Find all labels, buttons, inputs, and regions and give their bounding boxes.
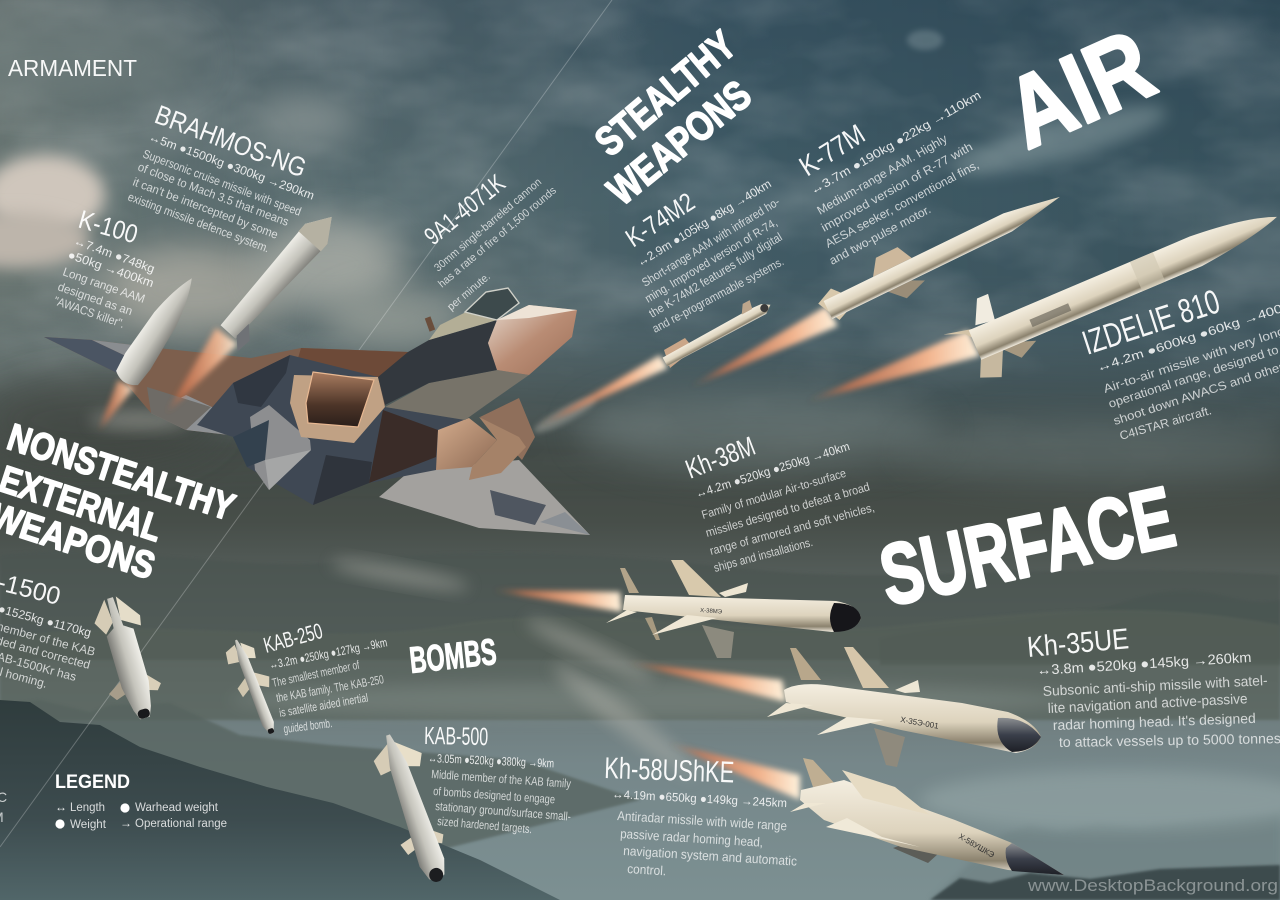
text block: IZDELIE 810: C4ISTAR aircraft. (1118, 403, 1213, 443)
text block: Kh-35UE: Subsonic anti-ship missile with satel- (1042, 672, 1268, 699)
text block: 9A1-4071K: per minute. (445, 271, 493, 313)
watermark: www.DesktopBackground.org (1027, 876, 1278, 895)
legend: length: ↔ (55, 800, 67, 814)
text block: Kh-35UE: lite navigation and active-passive (1047, 690, 1248, 716)
text block: Kh-35UE: to attack vessels up to 5000 tonnes (1059, 730, 1280, 750)
legend: weight (55, 819, 107, 831)
jet: forward fuselage (385, 370, 529, 420)
text block: K-77M: improved version of R-77 with (819, 139, 975, 235)
text block: Kh-58UShKE: Antiradar missile with wide range (617, 808, 787, 833)
text block: KAB-500: sized hardened targets. (437, 814, 533, 836)
heading: stealthy weapons: WEAPONS (599, 71, 760, 214)
text block: KAB-250: KAB-250 (261, 618, 325, 658)
text block: KAB-250: is satellite aided inertial (278, 691, 369, 720)
text block: K-77M: Medium-range AAM. Highly (814, 131, 950, 218)
text block: Kh-58UShKE (604, 752, 798, 878)
text block: K-74M2: and re-programmable systems. (650, 254, 786, 336)
text block: Kh-38M: missiles designed to defeat a broad (704, 480, 871, 540)
text block: IZDELIE 810: shoot down AWACS and other (1112, 360, 1280, 428)
text block: Kh-35UE: Kh-35UE (1026, 623, 1130, 664)
text block: KAB-1500 (0, 556, 97, 691)
text block: K-100: designed as an (56, 280, 134, 318)
text block: 9A1-4071K (419, 169, 559, 313)
legend: weight: Weight (70, 819, 107, 831)
text block: K-100: "AWACS killer". (52, 294, 127, 331)
text block: Kh-58UShKE: ↔4.19m ●650kg ●149kg →245km (612, 787, 787, 810)
text block: Kh-38M: range of armored and soft vehicles, (708, 500, 876, 558)
text block: K-74M2: K-74M2 (620, 186, 700, 253)
text block: Kh-38M: ships and installations. (712, 535, 814, 575)
text block: Kh-38M (681, 431, 876, 575)
text block: Kh-38M: ↔4.2m ●520kg ●250kg →40km (694, 439, 851, 501)
divider lines (0, 0, 612, 847)
legend: operational range: → (120, 816, 132, 830)
text block: K-77M: ↔3.7m ●190kg ●22kg →110km (808, 88, 983, 198)
text block: K-100: ●50kg →400km (66, 248, 156, 290)
text block: IZDELIE 810 (1078, 283, 1280, 443)
text block: Kh-58UShKE: control. (627, 861, 667, 878)
text block: BRAHMOS-NG: Supersonic cruise missile with speed (141, 147, 303, 219)
text block: K-77M: AESA seeker, conventional fins, (823, 158, 981, 251)
legend: operational range: Operational range (135, 818, 227, 830)
text block: K-74M2 (620, 177, 786, 336)
heading: bombs: BOMBS (408, 631, 498, 681)
missile: Kh-58UShKE (667, 743, 1064, 875)
text block: BRAHMOS-NG: it can't be intercepted by some (131, 175, 280, 242)
text fragments cut at left edge (0, 789, 7, 825)
text block: KAB-500: ↔3.05m ●520kg ●380kg →9km (428, 751, 554, 770)
jet fighter (44, 288, 590, 535)
smoke trails (90, 392, 703, 785)
missile: K-100 (98, 270, 204, 432)
text block: 9A1-4071K: 30mm single-barreled cannon (432, 176, 544, 274)
heading: nonstealthy external weapons: NONSTEALTHY (2, 417, 240, 529)
legend: length (55, 800, 105, 814)
text block: K-77M (794, 88, 983, 268)
missile: Kh-35UE (625, 647, 1041, 767)
heading: air: AIR (990, 8, 1169, 170)
text block: K-100: Long range AAM (61, 265, 147, 306)
jet: canopy (465, 288, 519, 320)
jet: central body (197, 355, 465, 505)
text block: IZDELIE 810: Air-to-air missile with very long (1102, 324, 1280, 396)
jet: weapons bays (369, 410, 438, 483)
bomb: KAB-250 (221, 634, 289, 739)
missile: IZDELIE 810 (805, 178, 1280, 402)
text block: BRAHMOS-NG: existing missile defence system. (126, 190, 271, 255)
bomb: KAB-500 (365, 727, 463, 889)
text block: K-77M: K-77M (794, 118, 870, 182)
text block: Kh-38M: Kh-38M (681, 431, 759, 485)
text block: KAB-500: stationary ground/surface small- (435, 799, 571, 824)
text block: K-74M2: ↔2.9m ●105kg ●8kg →40km (634, 177, 774, 270)
bomb: KAB-1500 (83, 591, 169, 726)
missile: Kh-58UShKE: X-58УШКЭ (957, 832, 996, 860)
missile: Kh-38M: X-38MЭ (700, 608, 723, 616)
text block: 9A1-4071K: 9A1-4071K (419, 169, 511, 251)
text block: KAB-250: the KAB family. The KAB-250 (275, 672, 385, 705)
text block: IZDELIE 810: IZDELIE 810 (1078, 283, 1225, 363)
text block: Kh-38M: Family of modular Air-to-surface (700, 466, 848, 522)
text block: K-74M2: ming. Improved version of R-74, (642, 215, 780, 306)
text block: K-77M: and two-pulse motor. (827, 202, 933, 268)
text block: BRAHMOS-NG: ↔5m ●1500kg ●300kg →290km (147, 130, 316, 203)
text block: KAB-500: Middle member of the KAB family (431, 767, 571, 791)
heading: nonstealthy external weapons (0, 417, 240, 588)
text block: KAB-500 (424, 722, 571, 836)
missile: K-77M (688, 174, 1070, 388)
text block: K-74M2: Short-range AAM with infrared ho- (639, 195, 782, 290)
missile: Kh-35UE: X-35Э-001 (900, 715, 940, 731)
jet: right engine (436, 418, 497, 470)
text block: BRAHMOS-NG (126, 100, 316, 255)
text block: K-100 (52, 204, 157, 331)
jet: right wing (379, 460, 590, 535)
heading: nonstealthy external weapons: EXTERNAL (0, 459, 167, 550)
legend: LEGEND (55, 772, 130, 793)
missile: Kh-38M (491, 560, 861, 658)
legend: length: Length (70, 802, 105, 814)
jet: left wing (44, 337, 408, 435)
text block: KAB-250 (261, 618, 388, 736)
text block: BRAHMOS-NG: BRAHMOS-NG (151, 100, 310, 183)
text block: KAB-500: KAB-500 (424, 722, 488, 751)
text block: KAB-250: The smallest member of (271, 658, 361, 690)
text block: Kh-35UE (1026, 623, 1280, 750)
missile: K-74M2 (535, 292, 773, 428)
text block: KAB-250: guided bomb. (283, 716, 333, 736)
jet: nose cone (488, 305, 577, 375)
jet: intake (306, 372, 374, 427)
legend: warhead weight: Warhead weight (135, 802, 219, 814)
text block: Kh-58UShKE: passive radar homing head, (620, 826, 763, 850)
text block: Kh-58UShKE: navigation system and automatic (623, 843, 798, 869)
text block: Kh-35UE: radar homing head. It's designed (1053, 710, 1256, 733)
text block: KAB-250: ↔3.2m ●250kg ●127kg →9km (268, 635, 388, 672)
text block: Kh-35UE: ↔3.8m ●520kg ●145kg →260km (1036, 649, 1252, 678)
text block: K-74M2: the K-74M2 features fully digital (646, 230, 785, 321)
heading: armament: ARMAMENT (8, 55, 137, 81)
missile: BRAHMOS-NG (165, 207, 348, 415)
text block: IZDELIE 810: ↔4.2m ●600kg ●60kg →400km (1095, 295, 1280, 375)
text block: KAB-500: of bombs designed to engage (433, 784, 556, 807)
text block: K-100: ↔7.4m ●748kg (72, 234, 157, 276)
legend (55, 772, 227, 831)
text block: Kh-58UShKE: Kh-58UShKE (604, 752, 735, 790)
text block: IZDELIE 810: operational range, designed to (1107, 342, 1280, 411)
text block: K-100: K-100 (75, 204, 141, 249)
text block: 9A1-4071K: has a rate of fire of 1,500 rounds (436, 184, 559, 290)
background: mountains and mist (0, 551, 1280, 900)
text block: BRAHMOS-NG: of close to Mach 3.5 that means (136, 160, 291, 229)
background: clouds (0, 20, 1280, 480)
